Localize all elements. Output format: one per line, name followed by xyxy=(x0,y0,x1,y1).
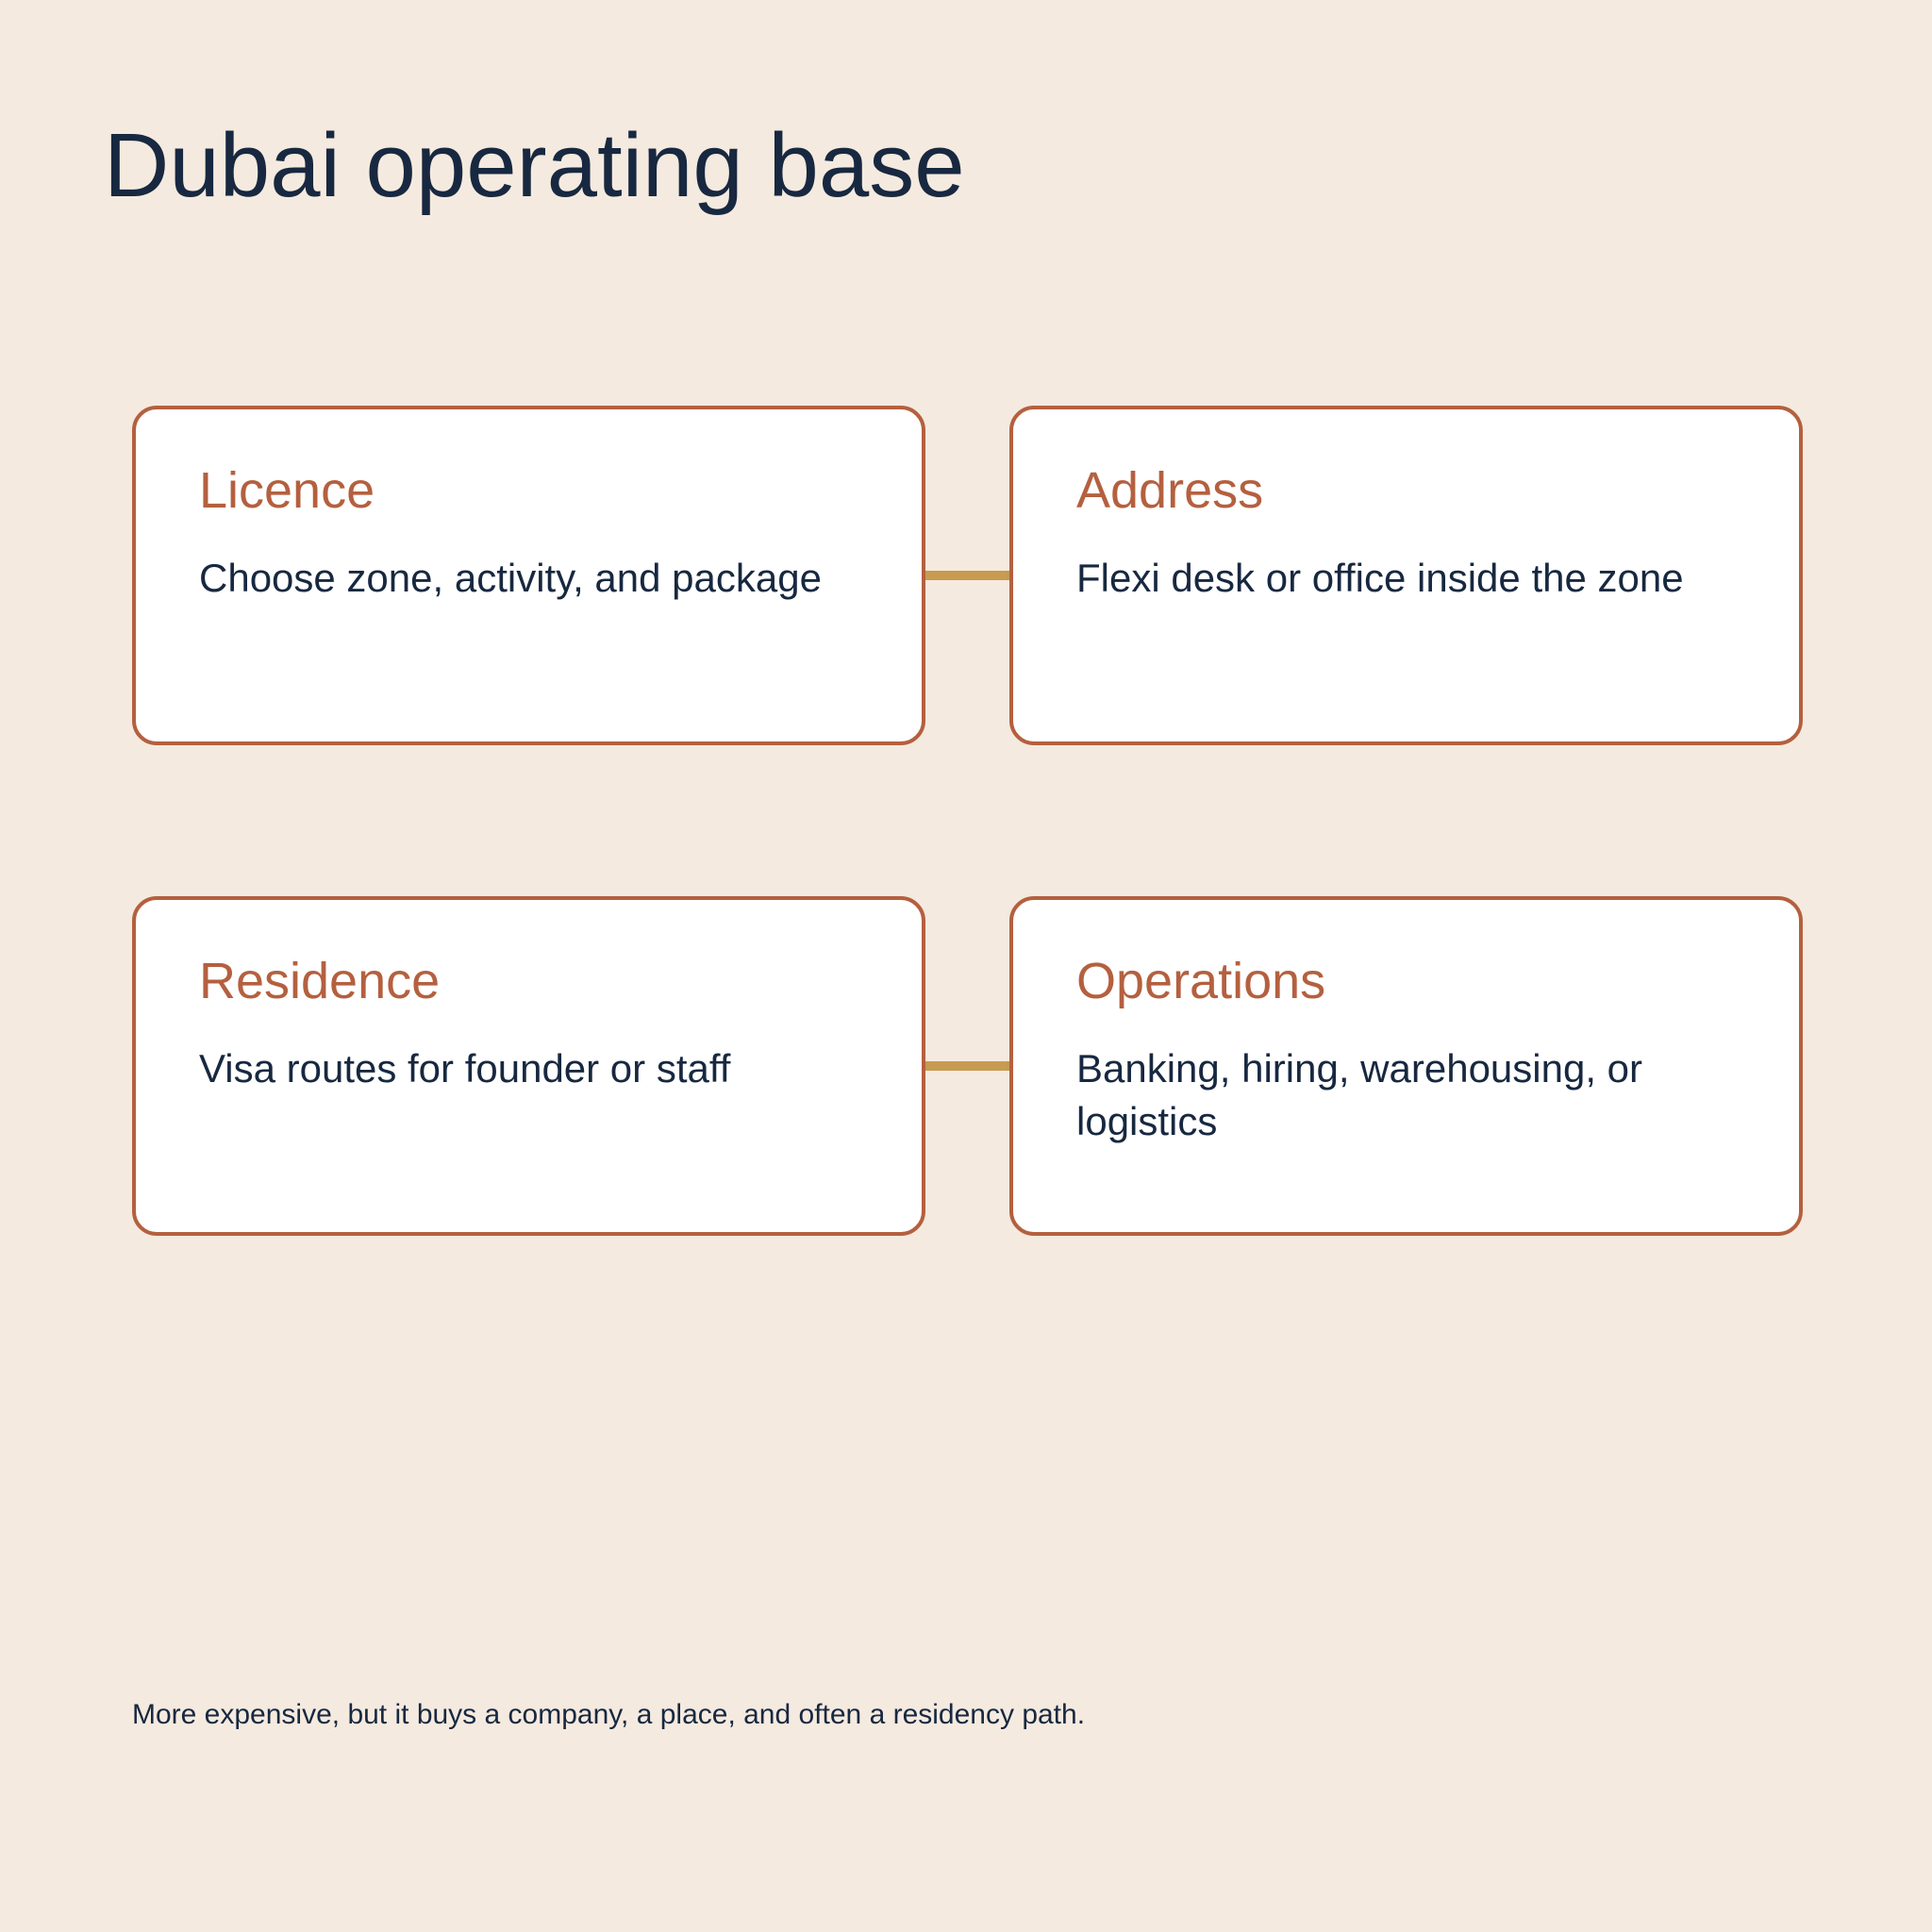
panel: operations xyxy=(1009,896,1803,1236)
connector: residence-operations xyxy=(923,1061,1012,1071)
panel: licence xyxy=(132,406,925,745)
footer note: More expensive, but it buys a company, a place, and often a residency path. xyxy=(132,1699,1085,1730)
text: address: Flexi desk or office inside the zone xyxy=(1076,556,1684,600)
panel: address xyxy=(1009,406,1803,745)
text: licence: Choose zone, activity, and package xyxy=(199,556,822,600)
panel: residence xyxy=(132,896,925,1236)
heading: licence: Licence xyxy=(199,462,375,519)
heading: operations: Operations xyxy=(1076,953,1325,1009)
text: operations: Banking, hiring, warehousing, or logistics xyxy=(1076,1046,1642,1143)
heading: residence: Residence xyxy=(199,953,440,1009)
text: residence: Visa routes for founder or staff xyxy=(199,1046,730,1091)
heading: address: Address xyxy=(1076,462,1263,519)
connector: licence-address xyxy=(923,571,1012,580)
title: Dubai operating base xyxy=(104,115,965,216)
